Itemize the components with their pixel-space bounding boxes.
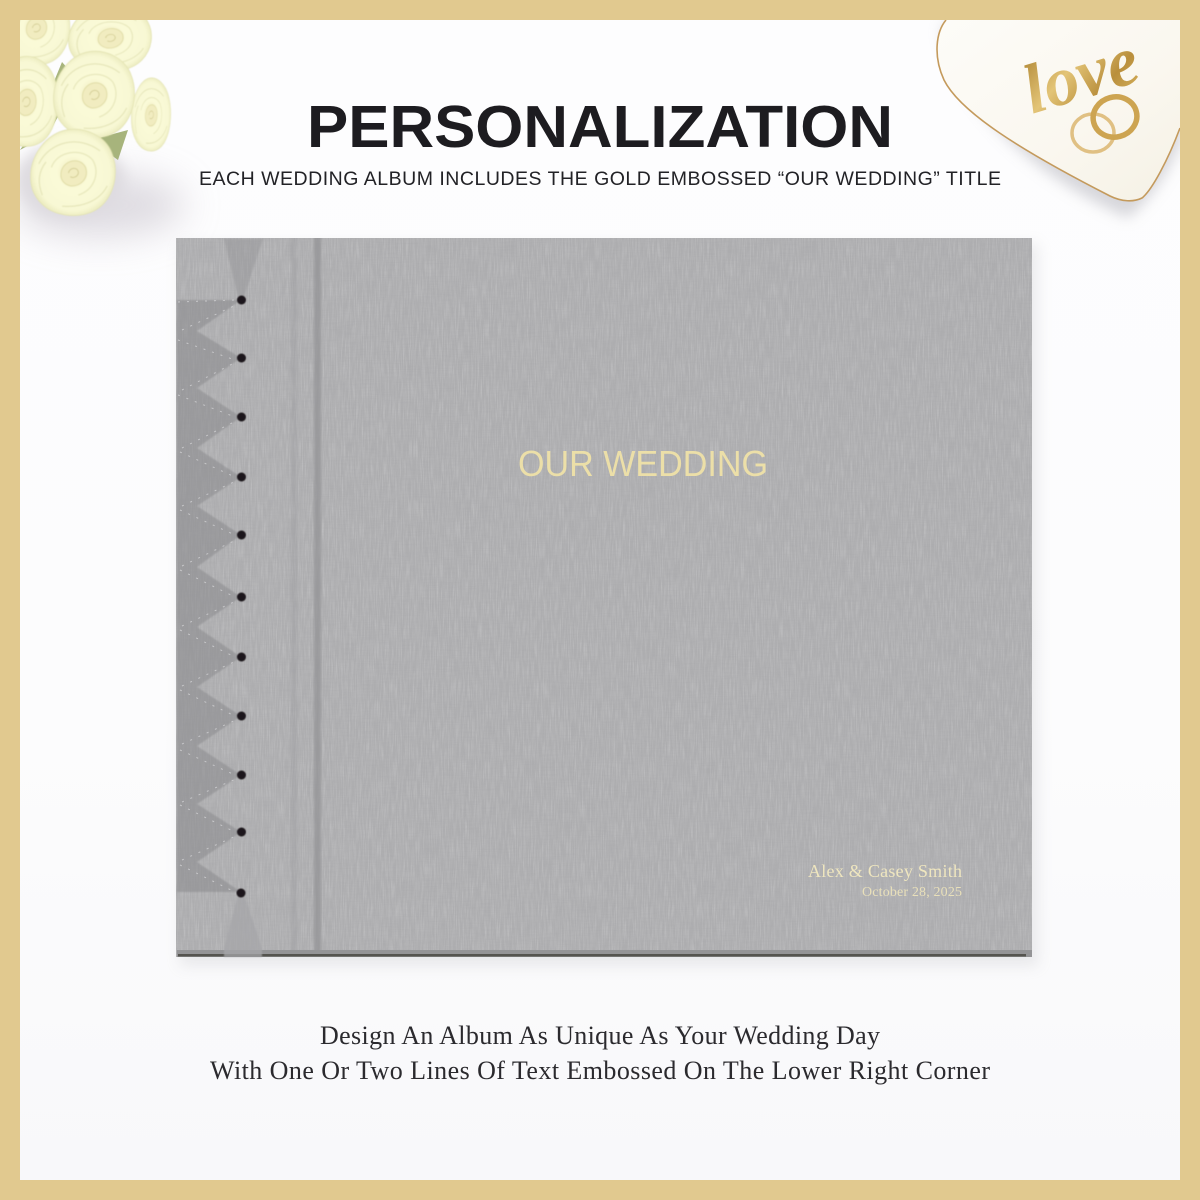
photo: heart dish with love lettering and rings (937, 20, 1182, 218)
heart dish (937, 20, 1180, 201)
caption line 2: With One Or Two Lines Of Text Embossed On The Lower Right Corner (210, 1056, 990, 1085)
embossed names: Alex & Casey Smith (808, 861, 962, 881)
organza ribbon lacing (177, 239, 263, 957)
gold rings (1072, 92, 1141, 152)
love lettering: love (1014, 22, 1148, 129)
photo: white roses bouquet (0, 0, 185, 237)
subtitle: EACH WEDDING ALBUM INCLUDES THE GOLD EMBOSSED “OUR WEDDING” TITLE (199, 168, 1001, 190)
bottom page edge (177, 950, 1032, 957)
ribbon sparkle (178, 300, 236, 892)
binding holes (236, 296, 246, 898)
heading: PERSONALIZATION (307, 94, 893, 160)
album: grey linen cover (176, 230, 1038, 966)
spine hinge grooves (291, 230, 321, 960)
embossed title: OUR WEDDING (518, 443, 768, 484)
caption (210, 1021, 990, 1085)
embossed date: October 28, 2025 (862, 885, 962, 900)
cover board (176, 238, 1032, 957)
caption line 1: Design An Album As Unique As Your Wedding Day (320, 1021, 880, 1050)
